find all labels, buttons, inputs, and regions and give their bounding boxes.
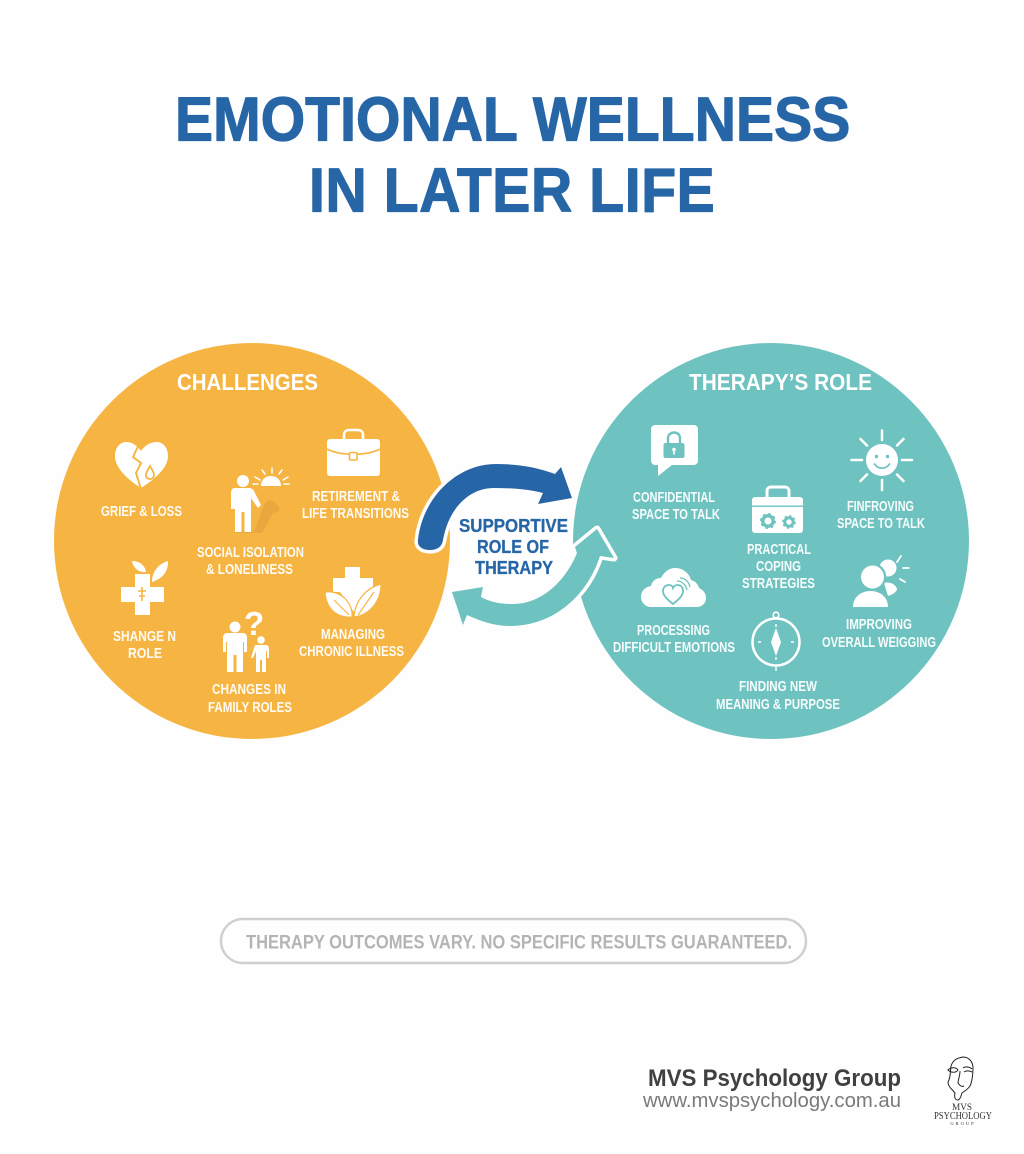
title: IN LATER LIFE	[309, 155, 715, 225]
disclaimer pill	[221, 919, 806, 963]
label: SHANGE N	[113, 629, 176, 645]
item: improving overall wellbeing	[822, 556, 936, 651]
icon: person with shadow and sun	[231, 468, 289, 533]
label: SPACE TO TALK	[632, 507, 720, 523]
label: PRACTICAL	[747, 542, 811, 558]
label	[632, 490, 720, 523]
label: SPACE TO TALK	[837, 516, 925, 532]
arrow: blue, challenges to therapy	[418, 464, 572, 550]
icon: line-art face	[948, 1057, 973, 1100]
label	[822, 617, 936, 651]
footer: organisation name and website: www.mvspsychology.com.au	[642, 1090, 901, 1112]
label: DIFFICULT EMOTIONS	[613, 640, 735, 656]
label: supportive role of therapy	[459, 516, 568, 578]
label: COPING	[756, 559, 801, 575]
label	[197, 545, 304, 578]
label: & LONELINESS	[206, 562, 293, 578]
icon: broken heart	[115, 442, 168, 489]
heading: challenges: CHALLENGES	[177, 369, 318, 395]
item: improving outlook	[837, 430, 925, 532]
item: changes in family roles	[208, 605, 292, 716]
label: OVERALL WEIGGING	[822, 635, 936, 651]
label: CONFIDENTIAL	[633, 490, 715, 506]
label: supportive role of therapy: THERAPY	[475, 558, 553, 578]
label: GRIEF & LOSS	[101, 504, 182, 520]
item: finding new meaning	[716, 612, 840, 713]
label	[302, 489, 409, 522]
footer: organisation name and website	[642, 1065, 901, 1112]
item: change in role	[113, 561, 176, 662]
label	[208, 682, 292, 716]
icon: smiling sun	[852, 430, 912, 490]
item: social isolation	[197, 468, 304, 578]
label: LIFE TRANSITIONS	[302, 506, 409, 522]
logo wordmark: PSYCHOLOGY	[934, 1111, 992, 1122]
logo wordmark: MVS	[952, 1103, 972, 1113]
label: STRATEGIES	[742, 576, 815, 592]
item: practical coping strategies	[742, 487, 815, 592]
label: supportive role of therapy: ROLE OF	[477, 537, 549, 557]
label	[299, 627, 404, 660]
item: grief and loss	[101, 442, 182, 520]
label: RETIREMENT &	[312, 489, 400, 505]
panel: challenges	[54, 343, 450, 739]
icon: adult and child with question mark: ?	[244, 605, 264, 642]
icon: briefcase	[327, 430, 380, 476]
label: MEANING & PURPOSE	[716, 697, 840, 713]
label: MANAGING	[321, 627, 385, 643]
icon: cloud with heart	[641, 568, 706, 607]
item: retirement	[302, 430, 409, 522]
label: FINFROVING	[847, 499, 914, 515]
panel: therapy's role	[573, 343, 969, 739]
label	[742, 542, 815, 592]
logo wordmark	[934, 1103, 992, 1126]
label	[613, 623, 735, 656]
logo wordmark: GROUP	[950, 1121, 976, 1126]
icon: cross with leaves	[121, 561, 168, 615]
label: FINDING NEW	[739, 679, 817, 695]
icon: toolbox with gears	[752, 487, 803, 533]
logo: MVS Psychology Group	[934, 1057, 992, 1126]
item: confidential space	[632, 425, 720, 523]
disclaimer pill: THERAPY OUTCOMES VARY. NO SPECIFIC RESULTS GUARANTEED.	[246, 932, 792, 954]
title: EMOTIONAL WELLNESS	[175, 84, 850, 154]
title	[175, 84, 850, 225]
icon: cross over leaves	[325, 567, 381, 617]
label: ROLE	[128, 646, 162, 662]
item: processing difficult emotions	[613, 568, 735, 656]
icon: compass	[752, 612, 800, 671]
label: supportive role of therapy: SUPPORTIVE	[459, 516, 568, 536]
label	[716, 679, 840, 713]
icon: chat bubble with lock	[651, 425, 698, 476]
label: PROCESSING	[637, 623, 710, 639]
item: managing chronic illness	[299, 567, 404, 660]
label: CHRONIC ILLNESS	[299, 644, 404, 660]
label	[113, 629, 176, 662]
label: FAMILY ROLES	[208, 700, 292, 716]
footer: organisation name and website: MVS Psychology Group	[648, 1065, 901, 1092]
label: IMPROVING	[846, 617, 912, 633]
heading: therapy's role: THERAPY’S ROLE	[689, 369, 872, 395]
label	[837, 499, 925, 532]
label: CHANGES IN	[212, 682, 286, 698]
arrow: teal, therapy to challenges	[452, 529, 614, 626]
label: SOCIAL ISOLATION	[197, 545, 304, 561]
icon: two people with rays	[853, 556, 909, 607]
